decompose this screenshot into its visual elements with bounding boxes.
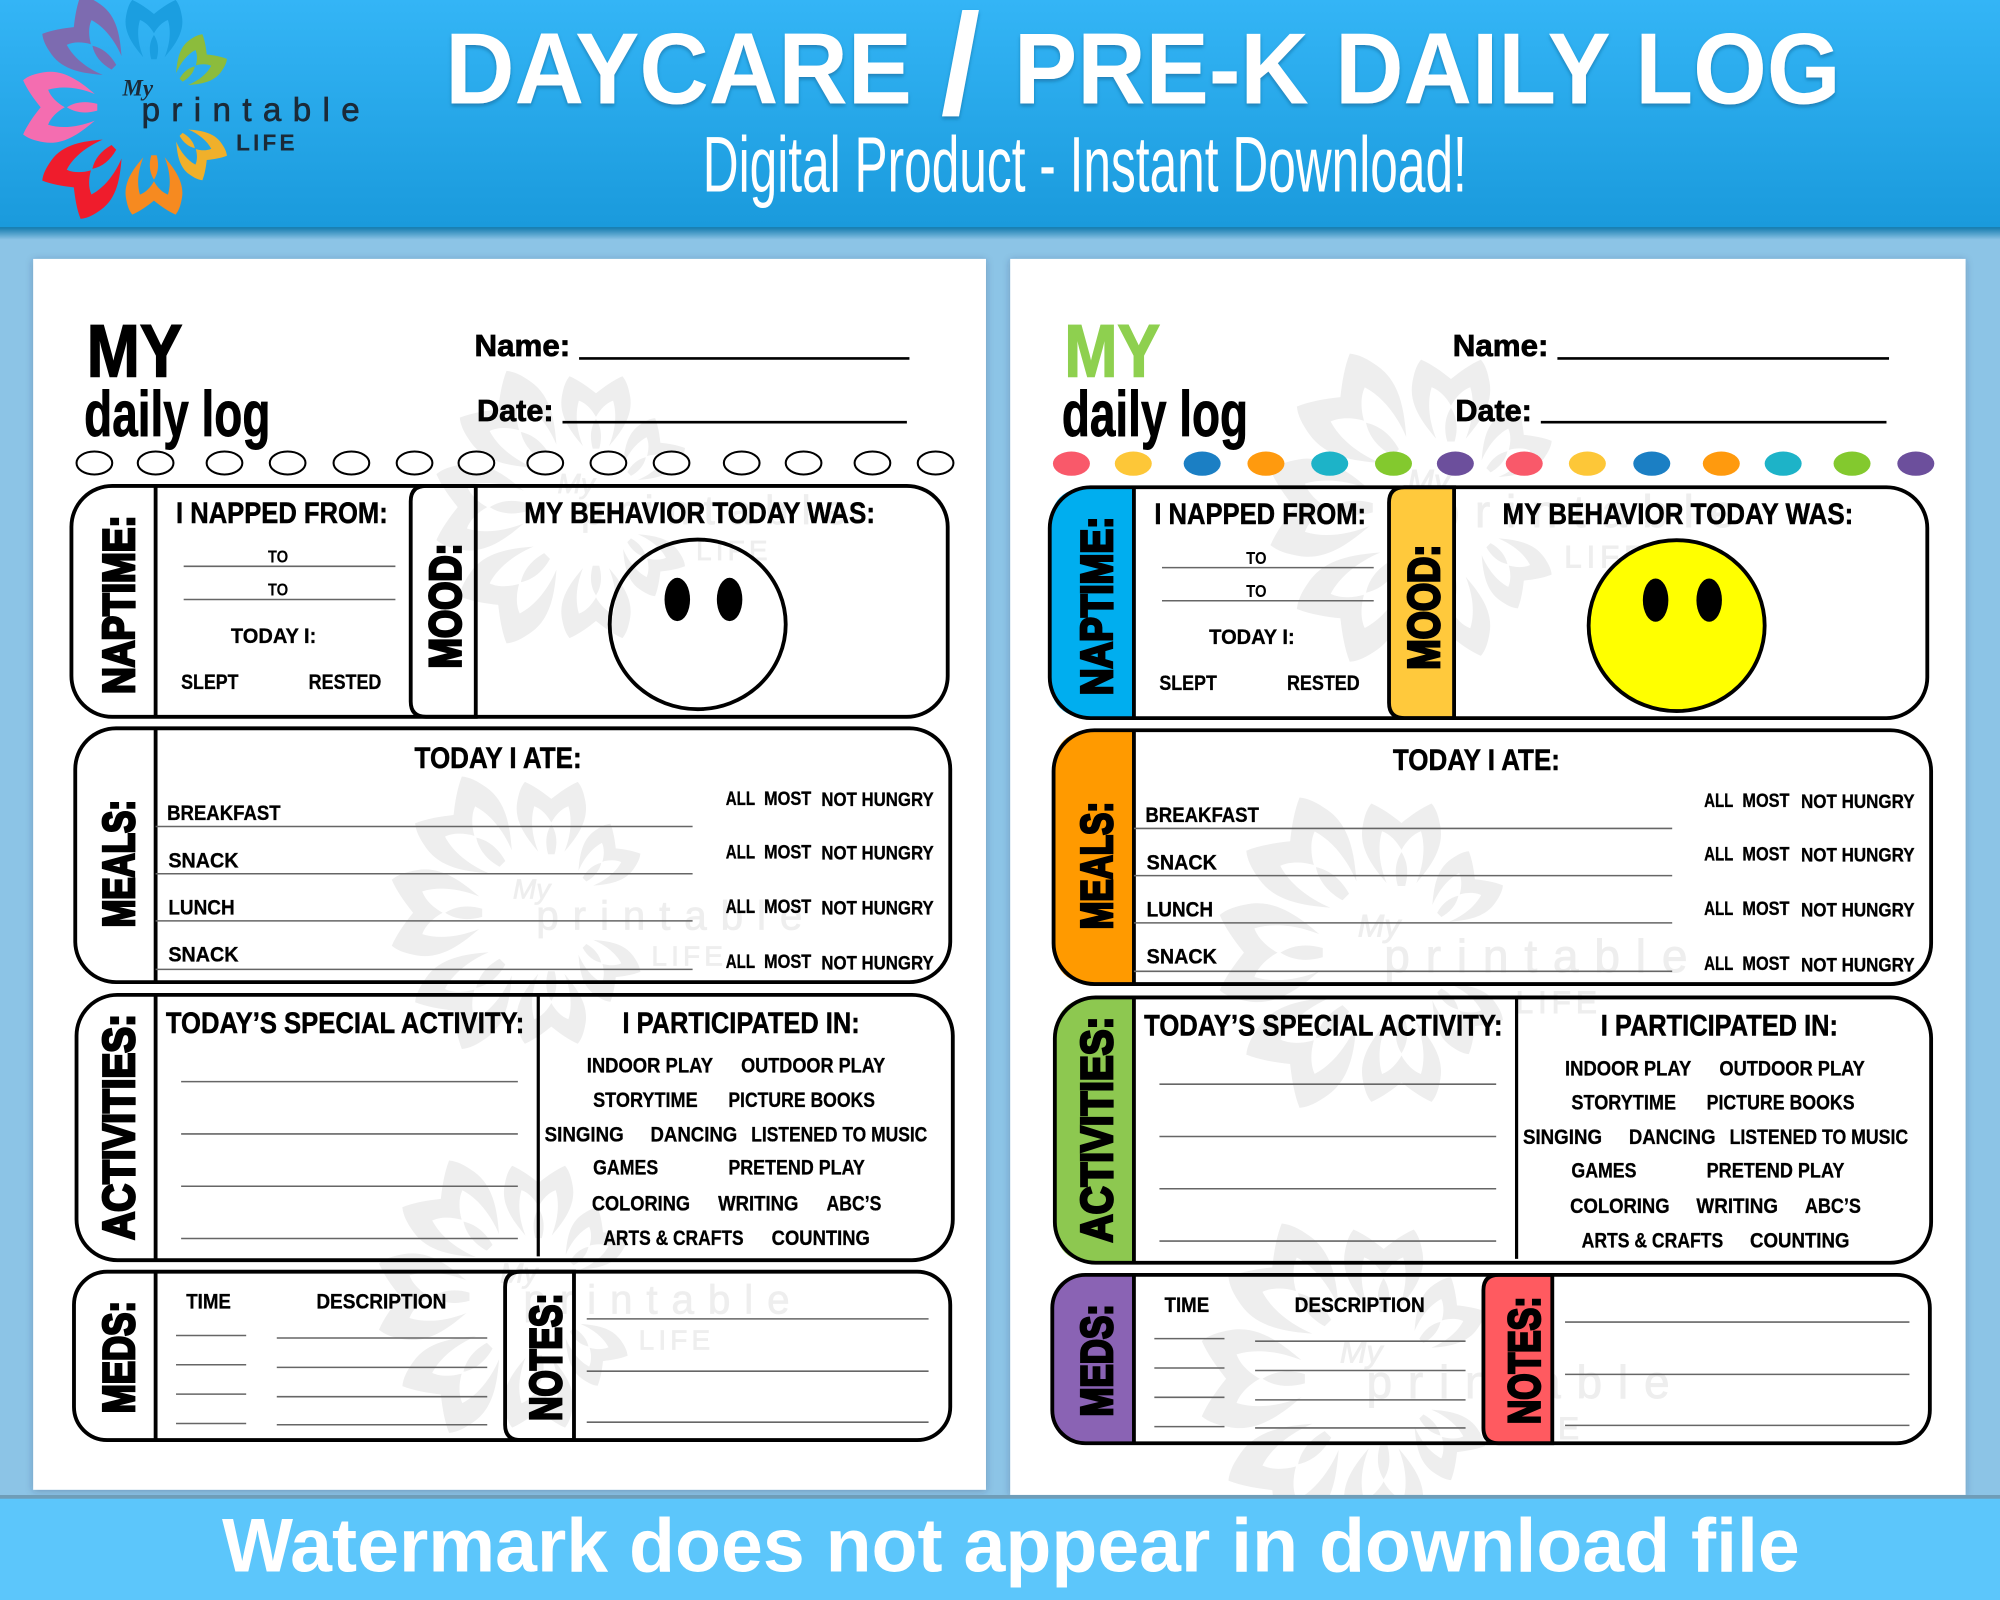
participated items: GAMES [593,1155,658,1180]
meal rows: SNACK [1147,849,1217,874]
nap choices: SLEPT [181,669,239,694]
meals heading: TODAY I ATE: [1393,744,1560,777]
watermarks: My [513,874,552,905]
mood label: MOOD: [1400,545,1449,670]
footer band [0,1495,2000,1600]
meds label: MEDS: [95,1301,144,1413]
activities label: ACTIVITIES: [1073,1017,1122,1242]
portion choices: MOST [1742,791,1790,812]
meds columns: TIME [186,1289,231,1314]
portion choices: MOST [764,842,811,863]
left sheet: meds and notes panel [74,1272,950,1440]
participated items: PRETEND PLAY [728,1155,865,1180]
nap time lines [1162,548,1374,601]
participated items: ABC’S [1805,1193,1861,1218]
participated items: ARTS & CRAFTS [603,1225,744,1250]
title [445,0,1841,145]
naptime label: NAPTIME: [95,515,144,694]
portion choices [726,789,934,974]
watermarks: LIFE [639,1324,710,1355]
activities label: ACTIVITIES: [95,1014,144,1240]
meal rows: LUNCH [1147,896,1213,921]
nap choices: SLEPT [1159,670,1217,695]
portion choices: MOST [1742,954,1790,975]
watermarks: printable [1384,930,1687,982]
portion choices: ALL [726,952,755,973]
watermarks: printable [1366,1356,1670,1408]
participated items: PRETEND PLAY [1707,1157,1845,1182]
special activity heading: TODAY’S SPECIAL ACTIVITY: [1144,1010,1503,1043]
meds lines [176,1335,487,1425]
nap choices [1159,624,1360,695]
portion choices: MOST [764,897,811,918]
right sheet: date field: Date: [1455,394,1532,428]
participated items: ABC’S [827,1190,881,1215]
left sheet: log heading: MY [87,309,182,392]
left sheet: log heading: daily log [84,378,270,450]
behavior heading: MY BEHAVIOR TODAY WAS: [1503,498,1853,531]
watermarks: My [500,1258,539,1289]
meal rows: BREAKFAST [1145,802,1259,827]
left sheet: dot row [77,452,953,474]
participated items: SINGING [545,1122,624,1147]
nap time lines: TO [1246,548,1267,568]
watermarks: My [1340,1334,1384,1370]
watermarks: printable [523,1277,790,1323]
nap heading: I NAPPED FROM: [1154,498,1366,531]
portion choices: NOT HUNGRY [1801,900,1915,921]
watermarks: My [1358,908,1402,944]
participated items: COLORING [1570,1193,1670,1218]
meal rows [1134,802,1672,971]
participated items: COUNTING [772,1225,870,1250]
nap choices [181,623,381,694]
participated items [545,1053,928,1250]
watermarks: LIFE [1515,984,1597,1020]
participated items: PICTURE BOOKS [1707,1090,1855,1115]
nap time lines [184,546,395,600]
participated items: GAMES [1571,1157,1636,1182]
portion choices [1704,791,1915,976]
mood label: MOOD: [421,543,470,668]
meal rows: BREAKFAST [167,800,281,825]
participated items: ARTS & CRAFTS [1582,1227,1723,1252]
right sheet: activities panel [1055,997,1931,1263]
participated items: SINGING [1523,1124,1602,1149]
meals label: MEALS: [1073,802,1122,929]
notes lines [1565,1322,1909,1425]
left sheet: log heading [84,309,270,450]
portion choices: MOST [1742,844,1790,865]
nap choices: RESTED [309,669,381,694]
participated items: LISTENED TO MUSIC [1730,1124,1908,1149]
participated items: DANCING [1629,1124,1716,1149]
watermarks: My [1407,463,1452,499]
right sheet: coloured dot row [1053,452,1934,476]
nap heading: I NAPPED FROM: [176,497,388,530]
nap choices: TODAY I: [1209,624,1295,649]
watermarks: LIFE [651,941,723,972]
right sheet: meds and notes panel [1052,1275,1930,1443]
meds columns: DESCRIPTION [1295,1292,1425,1317]
notes label: NOTES: [522,1293,571,1421]
participated items: OUTDOOR PLAY [741,1053,886,1078]
logo [23,0,360,225]
participated items: COLORING [592,1190,690,1215]
notes label: NOTES: [1501,1297,1550,1424]
mood face [1589,540,1765,711]
watermarks: My [558,468,597,499]
mood face [610,540,786,709]
special activity lines [1159,1084,1496,1241]
left sheet: name field: Name: [474,329,570,363]
meds columns: TIME [1165,1292,1209,1317]
meals heading: TODAY I ATE: [415,742,582,775]
participated items [1523,1055,1908,1252]
portion choices: NOT HUNGRY [1801,792,1915,813]
portion choices: ALL [726,789,755,810]
right sheet: log heading: MY [1064,309,1160,392]
watermarks: printable [536,893,802,939]
meds columns [186,1289,446,1314]
meds columns [1165,1292,1425,1317]
portion choices: NOT HUNGRY [821,953,934,974]
meal rows [156,800,693,969]
logo: My [121,76,154,101]
portion choices: ALL [726,897,755,918]
nap time lines: TO [268,546,288,566]
subtitle: Digital Product - Instant Download! [703,119,1467,208]
nap time lines: TO [268,580,288,600]
portion choices: MOST [764,952,811,973]
portion choices: MOST [764,789,811,810]
portion choices: ALL [726,842,755,863]
nap choices: TODAY I: [231,623,316,648]
footer text: Watermark does not appear in download file [222,1503,1800,1588]
participated items: WRITING [718,1190,798,1215]
header band [0,0,2000,240]
right sheet [1010,259,1966,1495]
portion choices: ALL [1704,844,1734,865]
left sheet: meals panel [75,728,950,982]
nap choices: RESTED [1287,670,1360,695]
right sheet: log heading [1062,309,1248,450]
nap time lines: TO [1246,581,1267,601]
right sheet: log heading: daily log [1062,378,1248,450]
logo: printable [142,92,360,129]
left sheet [33,259,986,1490]
watermarks: printable [1434,486,1735,537]
behavior heading: MY BEHAVIOR TODAY WAS: [524,497,875,530]
logo: LIFE [236,130,295,156]
naptime label: NAPTIME: [1073,517,1122,695]
participated items: INDOOR PLAY [1565,1055,1692,1080]
portion choices: NOT HUNGRY [821,790,934,811]
meds lines [1154,1339,1466,1428]
participated items: INDOOR PLAY [587,1053,713,1078]
meal rows: SNACK [168,942,239,967]
right sheet: naptime and mood panel [1050,487,1927,718]
meal rows: LUNCH [168,895,235,920]
participated items: STORYTIME [1571,1090,1676,1115]
title: DAYCARE [445,13,912,125]
meal rows: SNACK [168,847,239,872]
portion choices: NOT HUNGRY [821,899,934,920]
left sheet: activities panel [77,995,953,1260]
meds columns: DESCRIPTION [316,1289,446,1314]
watermarks: printable [581,487,847,533]
title: PRE-K DAILY LOG [1014,13,1841,125]
meals label: MEALS: [95,800,144,927]
portion choices: ALL [1704,791,1734,812]
meds label: MEDS: [1073,1304,1122,1416]
portion choices: MOST [1742,899,1790,920]
special activity lines [181,1082,518,1239]
portion choices: NOT HUNGRY [1801,955,1915,976]
participated items: WRITING [1696,1193,1778,1218]
watermarks [379,345,1735,1542]
right sheet: meals panel [1054,730,1931,984]
participated items: COUNTING [1750,1227,1849,1252]
portion choices: ALL [1704,954,1734,975]
watermarks: LIFE [1564,538,1645,574]
special activity heading: TODAY’S SPECIAL ACTIVITY: [166,1007,524,1040]
participated heading: I PARTICIPATED IN: [622,1007,860,1040]
left sheet: date field: Date: [477,394,554,428]
participated items: STORYTIME [593,1087,698,1112]
participated items: DANCING [651,1122,737,1147]
watermarks: LIFE [1498,1410,1579,1446]
notes lines [587,1319,929,1422]
left sheet: naptime and mood panel [71,486,948,717]
meal rows: SNACK [1147,944,1217,969]
portion choices: NOT HUNGRY [821,844,934,865]
portion choices: ALL [1704,899,1734,920]
watermarks: LIFE [696,535,768,566]
participated items: LISTENED TO MUSIC [751,1122,928,1147]
participated heading: I PARTICIPATED IN: [1601,1010,1838,1043]
participated items: PICTURE BOOKS [728,1087,875,1112]
right sheet: name field: Name: [1453,329,1548,363]
participated items: OUTDOOR PLAY [1719,1055,1865,1080]
portion choices: NOT HUNGRY [1801,846,1915,867]
